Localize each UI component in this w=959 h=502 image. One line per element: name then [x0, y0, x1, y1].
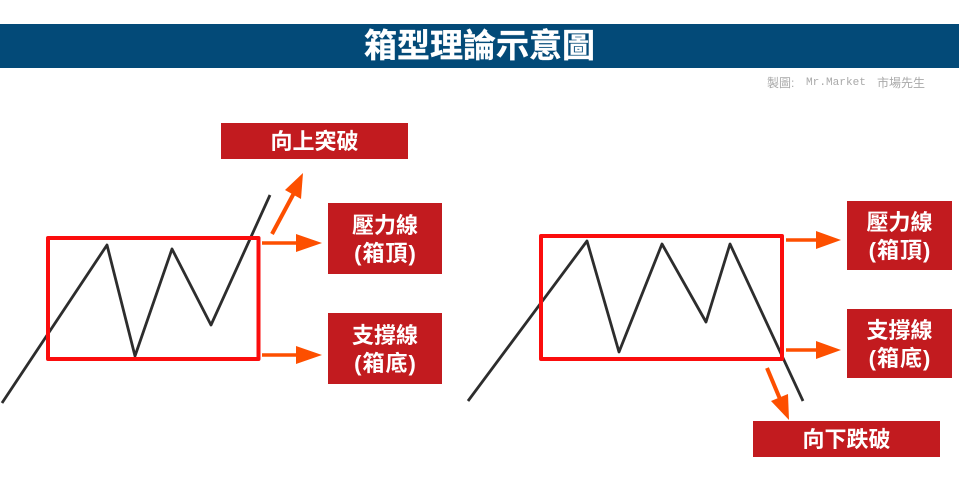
credit text: 製圖: — [767, 76, 794, 90]
arrow: left support — [262, 346, 322, 364]
label: upward breakout — [221, 123, 408, 159]
label: right resistance: (箱頂) — [869, 238, 931, 262]
box range: left — [48, 238, 258, 359]
label: left support: (箱底) — [354, 350, 417, 376]
credit text — [767, 76, 925, 90]
label: left support: 支撐線 — [352, 322, 418, 348]
price line: downward breakdown — [468, 241, 803, 401]
credit text: 市場先生 — [877, 76, 925, 90]
price line: upward breakout — [2, 195, 270, 403]
label: right support: 支撐線 — [866, 318, 932, 342]
title banner — [0, 24, 959, 68]
label: downward breakdown — [753, 421, 940, 457]
label: upward breakout: 向上突破 — [270, 129, 358, 154]
label: left resistance: (箱頂) — [354, 240, 417, 266]
arrow: right resistance — [786, 231, 841, 249]
label: left resistance: 壓力線 — [352, 212, 418, 238]
label: downward breakdown: 向下跌破 — [802, 427, 890, 452]
label: right resistance — [847, 201, 952, 270]
label: left resistance — [328, 203, 442, 274]
arrow: right support — [786, 341, 841, 359]
label: right support — [847, 309, 952, 378]
arrow: breakdown down — [767, 368, 789, 420]
arrow: breakout up — [272, 173, 303, 234]
arrow: left resistance — [262, 234, 322, 252]
label: right support: (箱底) — [869, 346, 931, 370]
title banner: 箱型理論示意圖 — [364, 27, 595, 64]
label: left support — [328, 313, 442, 384]
box range: right — [541, 236, 782, 359]
label: right resistance: 壓力線 — [866, 210, 932, 234]
credit text: Mr.Market — [806, 77, 866, 89]
